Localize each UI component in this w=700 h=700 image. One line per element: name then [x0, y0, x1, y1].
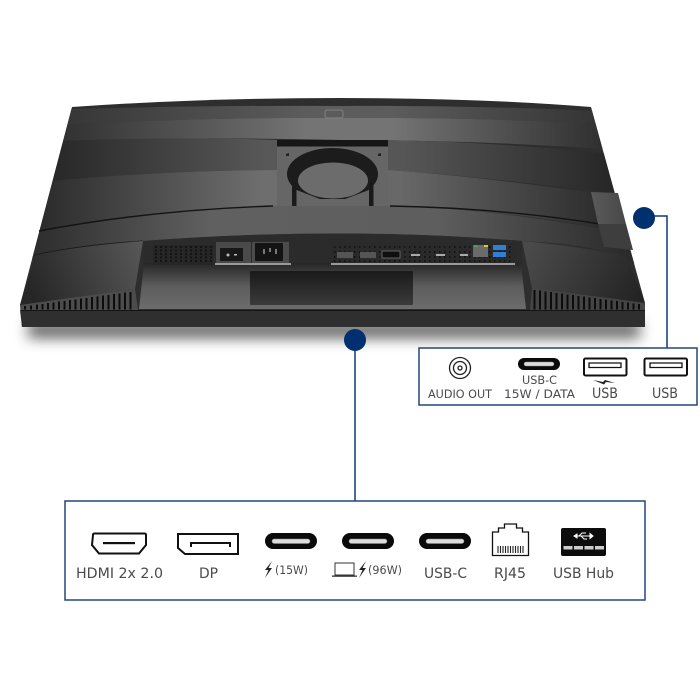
IO recess: [143, 234, 522, 265]
icon: USB-C: [419, 533, 471, 549]
icon: DisplayPort: [178, 534, 238, 554]
stand area: [139, 263, 526, 309]
Philips logo: [325, 110, 343, 118]
label: USB: USB: [652, 386, 678, 402]
label: USB Hub: USB Hub: [553, 566, 614, 582]
side bump: [591, 192, 633, 250]
icon: USB-C 15W: [265, 533, 317, 549]
rear IO panel: [331, 243, 517, 263]
icon: HDMI: [92, 534, 146, 554]
monitor rear view: [0, 90, 700, 340]
label: audio out: AUDIO OUT: [428, 387, 493, 401]
left vent block: [20, 241, 143, 310]
USB-C ports: [411, 254, 468, 256]
callout dot: side: [633, 207, 655, 229]
callout connector: bottom ports: [344, 329, 366, 501]
power socket: [252, 242, 289, 264]
DP port: [382, 251, 400, 258]
icon: USB-C 96W: [342, 533, 394, 549]
icon: USB: [644, 358, 687, 376]
USB 3 ports: [493, 245, 506, 250]
bottom edge: [20, 310, 645, 327]
mount ring: [287, 148, 378, 200]
recess floor below ring: [296, 190, 369, 206]
icon: charging USB: [584, 358, 626, 384]
icon: RJ45: [492, 524, 528, 556]
icon: USB tongue: [650, 363, 682, 368]
HDMI ports: [337, 252, 353, 258]
mount disc: [298, 162, 368, 198]
icon: USB-C: [518, 358, 560, 370]
label: laptop 96W power: (96W): [368, 563, 402, 577]
label: DP: DP: [199, 566, 218, 582]
power switch: [216, 242, 251, 264]
label: USB charging: USB: [592, 386, 618, 402]
lower seam line: [35, 241, 143, 255]
label: USB-C: USB-C: [424, 566, 467, 582]
panel seam lines: [39, 206, 600, 231]
screw holes: [286, 153, 381, 156]
mount legs: [292, 182, 374, 206]
panel: rear ports: [65, 501, 645, 600]
label: HDMI: HDMI 2x 2.0: [76, 566, 163, 582]
monitor body with bands: [20, 98, 645, 326]
panel: side ports: [419, 348, 697, 405]
icon: audio out: [450, 358, 470, 378]
shadow: [28, 322, 640, 338]
RJ45 port: [473, 245, 488, 257]
label: USB-C 15W / DATA: USB-C: [522, 373, 557, 387]
label: RJ45: RJ45: [494, 566, 526, 582]
callout connector: side ports: [633, 207, 667, 348]
label: laptop 96W power: [332, 561, 402, 578]
VESA recess: [277, 140, 388, 206]
icon: USB hub: [561, 528, 606, 556]
silver ledges: [215, 263, 515, 265]
dark stand rectangle: [250, 271, 413, 305]
label: 15W power: [265, 561, 308, 578]
callout dot: bottom: [344, 329, 366, 351]
label: USB-C 15W / DATA: [504, 373, 575, 401]
right vent block: [522, 241, 645, 310]
label: 15W power: (15W): [275, 563, 308, 577]
left vents: [153, 245, 213, 265]
label: USB-C 15W / DATA: 15W / DATA: [504, 387, 575, 401]
